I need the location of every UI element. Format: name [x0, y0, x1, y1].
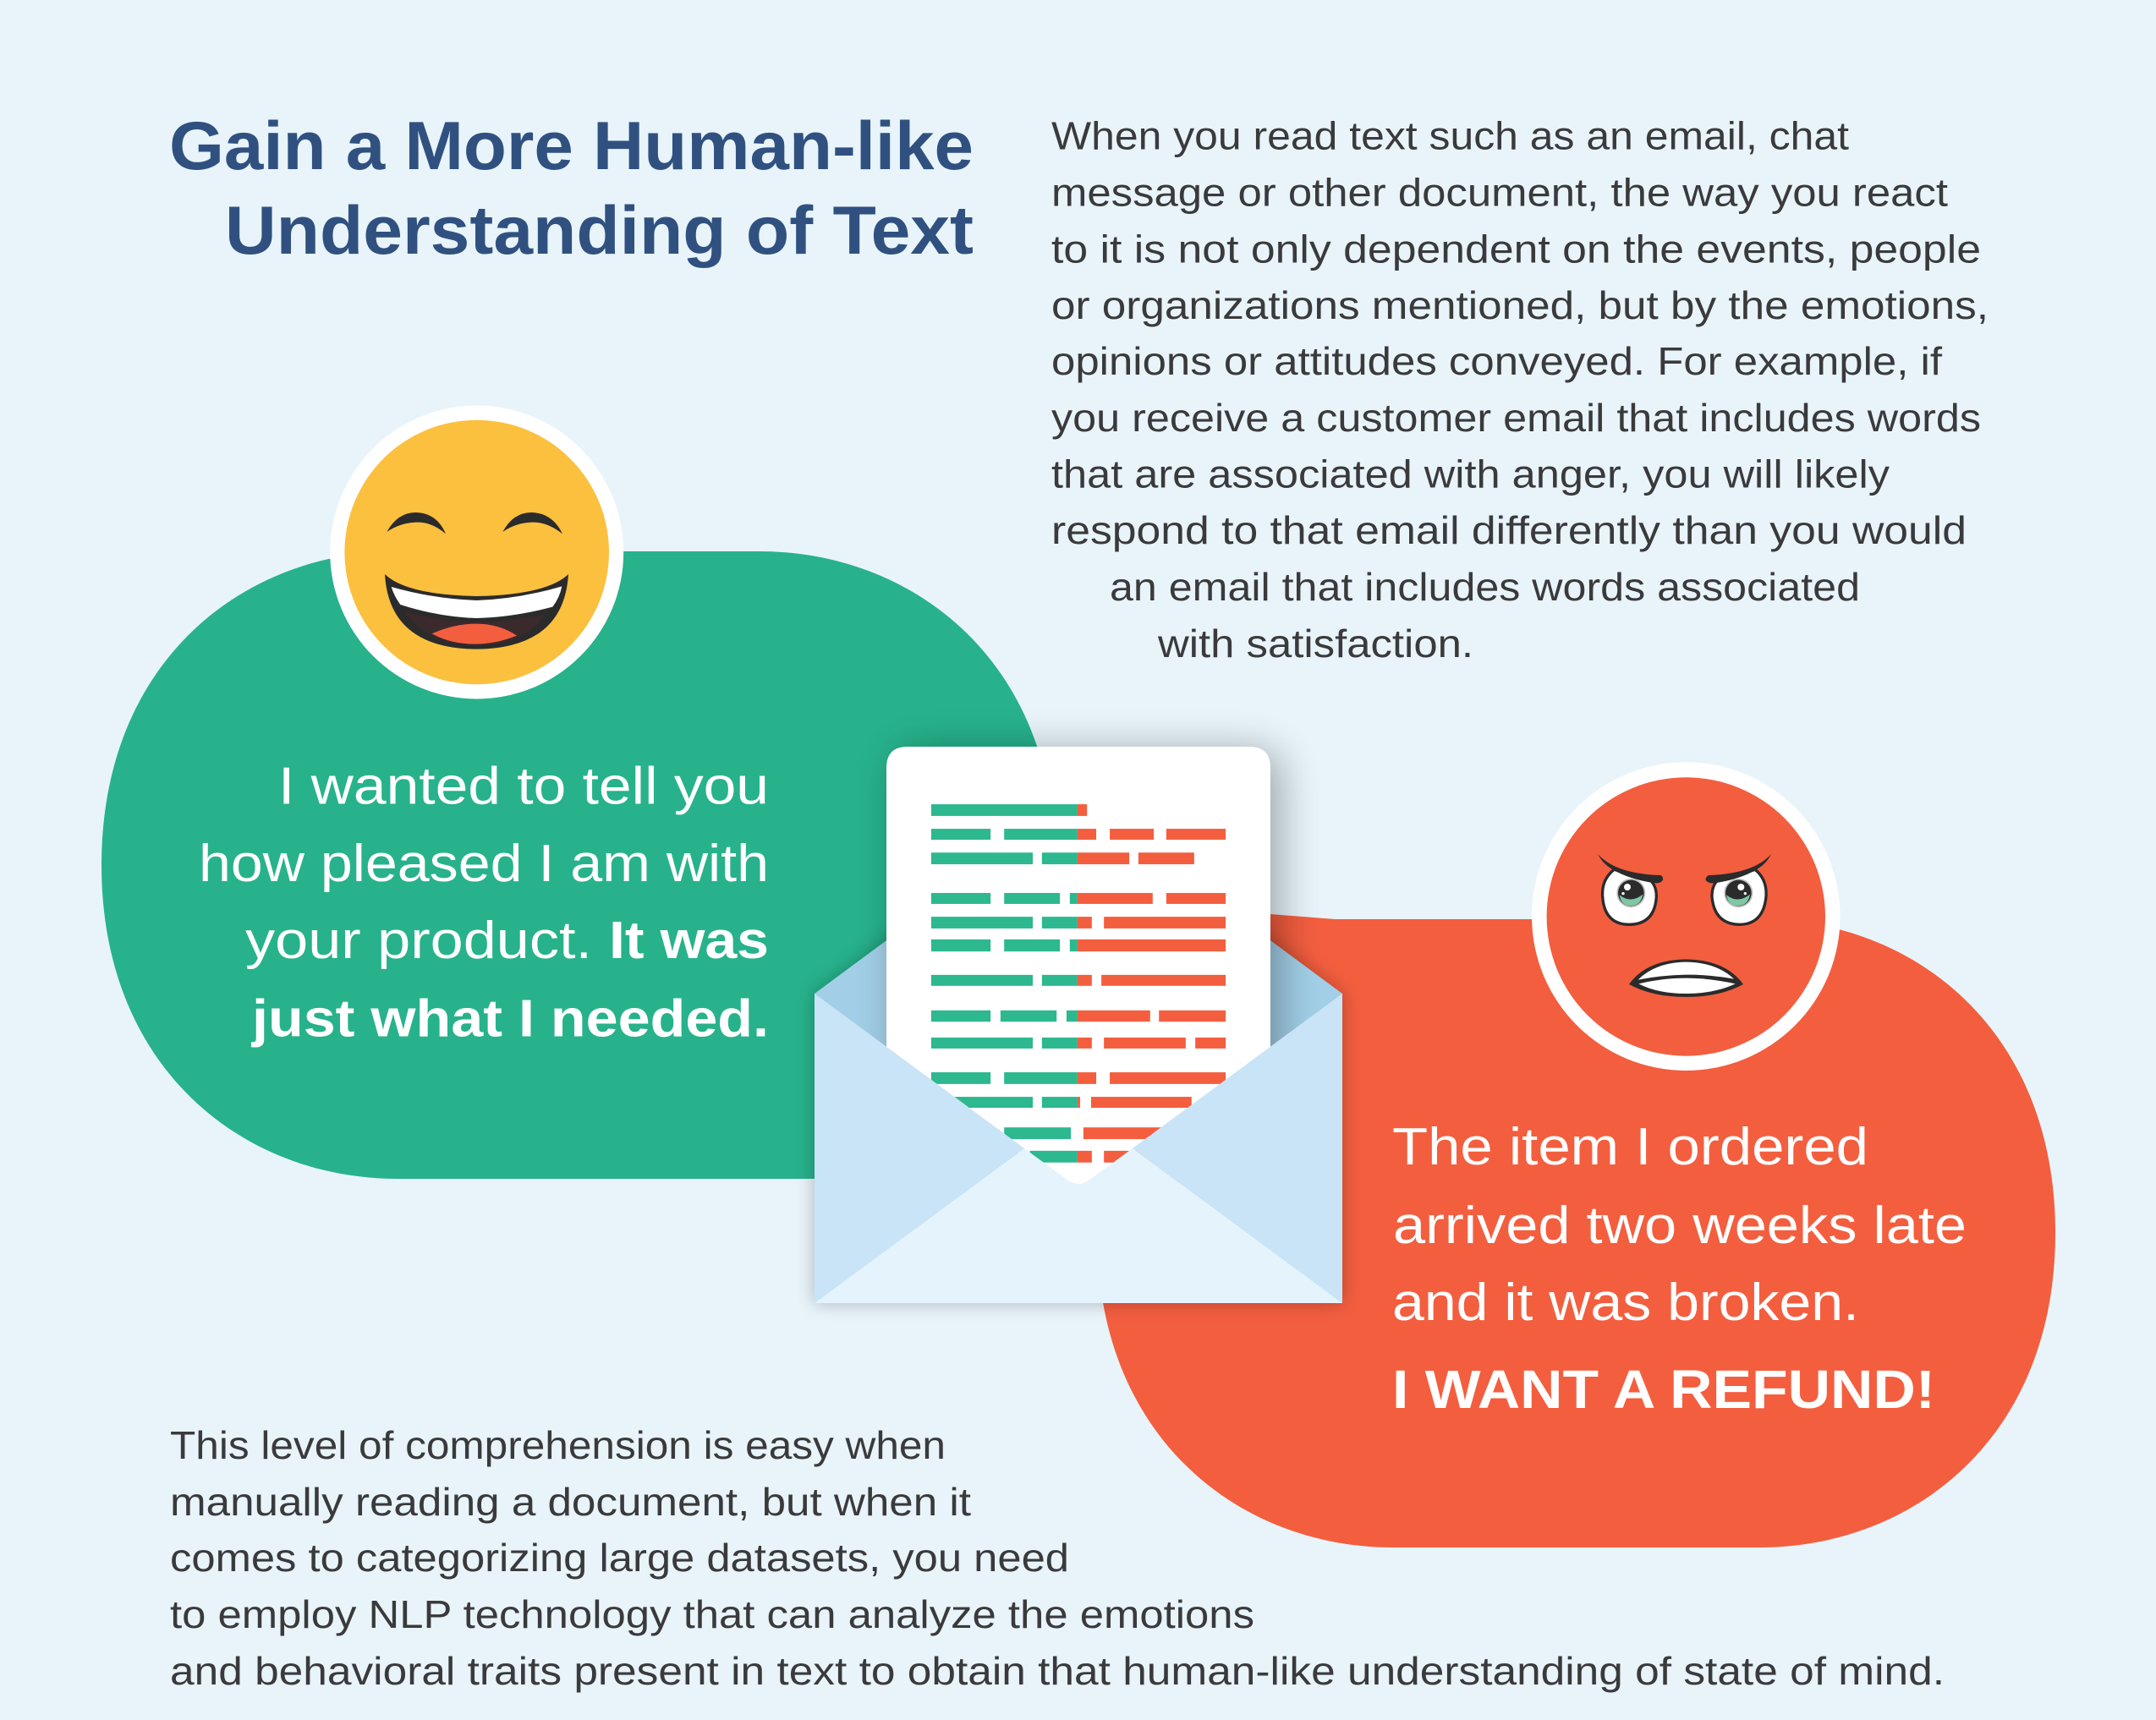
closing paragraph: to employ NLP technology that can analyze the emotions: [170, 1592, 1254, 1636]
envelope right flap: [1133, 994, 1342, 1303]
panel: orange angry speech bubble: [1097, 910, 2055, 1547]
intro paragraph: to it is not only dependent on the events, people: [1051, 227, 1981, 271]
intro paragraph: with satisfaction.: [1157, 622, 1473, 666]
intro paragraph: an email that includes words associated: [1110, 565, 1860, 609]
green bubble message: how pleased I am with: [199, 835, 769, 893]
closing paragraph: [170, 1423, 1945, 1693]
green bubble message: [199, 758, 769, 1049]
icon: laughing emoji: [330, 406, 623, 698]
orange bubble message: I WANT A REFUND!: [1392, 1359, 1935, 1420]
intro paragraph: or organizations mentioned, but by the emotions,: [1051, 283, 1989, 327]
green bubble message: just what I needed.: [251, 990, 769, 1049]
panel: green happy speech bubble: [101, 551, 1056, 1179]
intro paragraph: When you read text such as an email, chat: [1051, 113, 1849, 157]
intro paragraph: you receive a customer email that includes words: [1051, 396, 1981, 440]
envelope front pocket: [815, 1148, 1342, 1303]
heading: Understanding of Text: [225, 193, 974, 269]
icon: open envelope with document: [815, 747, 1342, 1303]
document sheet: [886, 747, 1270, 1201]
icon: angry emoji: [1532, 762, 1841, 1071]
intro paragraph: opinions or attitudes conveyed. For example, if: [1051, 339, 1942, 383]
green bubble message: your product.: [245, 912, 592, 970]
document text bars: [931, 804, 1226, 1163]
closing paragraph: This level of comprehension is easy when: [170, 1423, 946, 1467]
heading: [169, 108, 974, 269]
green bubble message: I wanted to tell you: [278, 758, 769, 816]
closing paragraph: comes to categorizing large datasets, you need: [170, 1536, 1069, 1580]
heading: Gain a More Human-like: [169, 108, 974, 184]
closing paragraph: manually reading a document, but when it: [170, 1480, 971, 1524]
orange bubble message: and it was broken.: [1392, 1274, 1859, 1332]
orange bubble message: [1392, 1118, 1967, 1420]
intro paragraph: respond to that email differently than you would: [1051, 508, 1967, 552]
closing paragraph: and behavioral traits present in text to obtain that human-like understanding of state of mind.: [170, 1649, 1945, 1693]
green bubble message: It was: [609, 912, 769, 970]
envelope back flap: [815, 798, 1342, 1303]
intro paragraph: [1051, 113, 1989, 666]
intro paragraph: that are associated with anger, you will likely: [1051, 452, 1890, 496]
intro paragraph: message or other document, the way you react: [1051, 171, 1948, 215]
orange bubble message: arrived two weeks late: [1393, 1197, 1967, 1255]
orange bubble message: The item I ordered: [1392, 1118, 1868, 1176]
envelope left flap: [815, 994, 1024, 1303]
